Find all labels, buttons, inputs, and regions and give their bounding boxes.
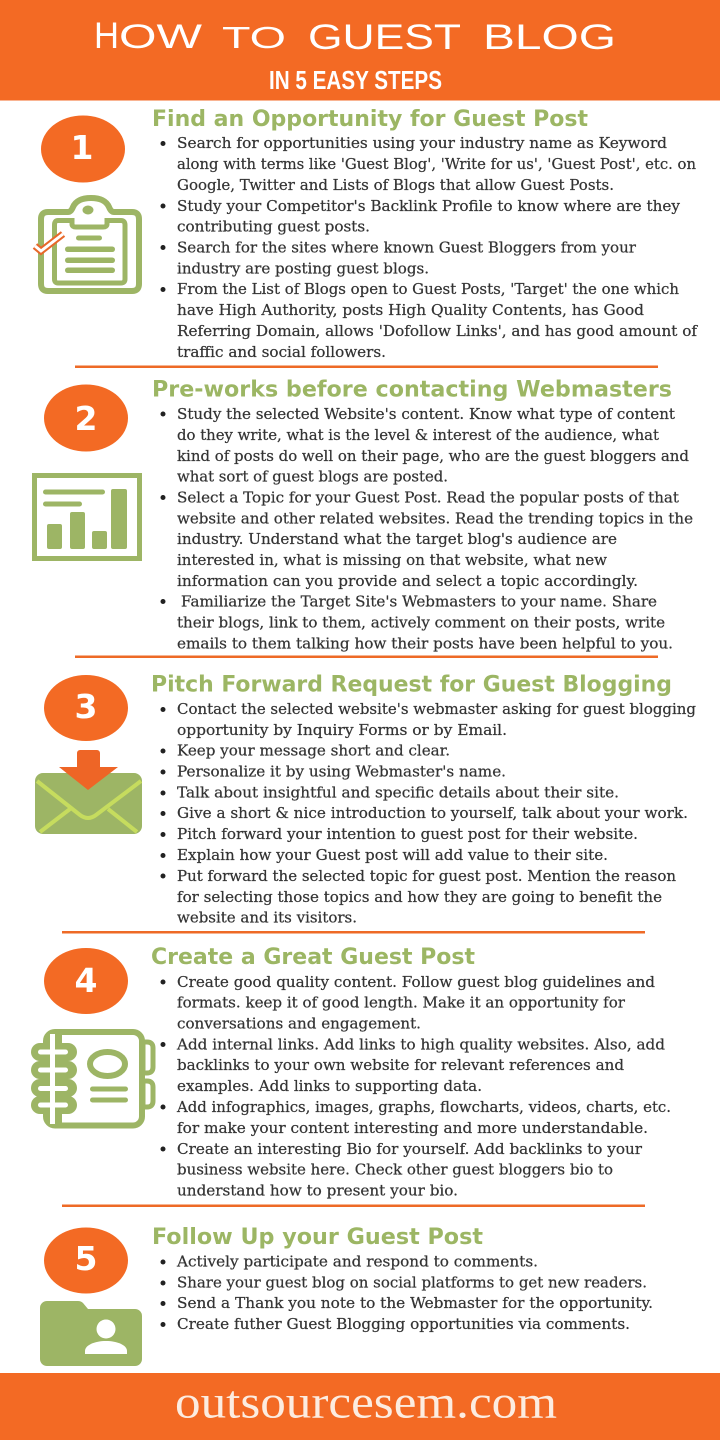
bullet list: step 1: Referring Domain, allows 'Dofollow Links', and has good amount of bbox=[177, 324, 699, 340]
bullet list: step 5: Actively participate and respond to comments. bbox=[176, 1254, 538, 1270]
bullet list: step 2 bbox=[160, 407, 693, 652]
panel: step 4 create a great guest post bbox=[31, 944, 671, 1200]
panel: step 2 pre-works bbox=[34, 376, 693, 652]
bullet list: step 2: do they write, what is the level & interest of the audience, what bbox=[177, 428, 659, 444]
title: BLOG bbox=[483, 18, 616, 57]
bullet list: step 2: industry. Understand what the target blog's audience are bbox=[177, 532, 617, 548]
bullet list: step 5: Send a Thank you note to the Webmaster for the opportunity. bbox=[177, 1296, 653, 1312]
bullet list: step 4: formats. keep it of good length. Make it an opportunity for bbox=[177, 996, 625, 1012]
bullet list: step 1: industry are posting guest blogs. bbox=[177, 262, 429, 278]
badge: number 1: 1 bbox=[71, 128, 93, 167]
panel: step 3 pitch forward bbox=[35, 672, 696, 926]
icon: folder with person bbox=[40, 1301, 142, 1366]
bullet list: step 1: From the List of Blogs open to Guest Posts, 'Target' the one which bbox=[177, 282, 679, 298]
bullet list: step 1: Search for opportunities using your industry name as Keyword bbox=[177, 136, 667, 152]
bullet list: step 4: examples. Add links to supporting data. bbox=[177, 1079, 482, 1095]
bullet list: step 1 bbox=[160, 136, 699, 361]
bullet list: step 3: Pitch forward your intention to guest post for their website. bbox=[177, 827, 638, 843]
badge: number 4: 4 bbox=[75, 961, 97, 1000]
bullet list: step 2: Familiarize the Target Site's Webmasters to your name. Share bbox=[181, 594, 657, 610]
bullet list: step 4: understand how to present your bio. bbox=[177, 1184, 458, 1200]
badge: number 5 bbox=[44, 1228, 128, 1294]
heading: step 4: Create a Great Guest Post bbox=[151, 944, 475, 970]
bullet list: step 4 bbox=[160, 975, 671, 1200]
icon: bar chart report bbox=[34, 476, 140, 558]
bullet list: step 2: website and other related websites. Read the trending topics in the bbox=[177, 512, 693, 528]
title bbox=[94, 15, 616, 57]
bullet list: step 2: interested in, what is missing on that website, what new bbox=[177, 553, 608, 569]
bullet list: step 1: Study your Competitor's Backlink Profile to know where are they bbox=[177, 199, 681, 215]
heading: step 1: Find an Opportunity for Guest Post bbox=[152, 106, 588, 132]
bullet list: step 3: Talk about insightful and specific details about their site. bbox=[177, 786, 619, 802]
bullet list: step 4: Create good quality content. Follow guest blog guidelines and bbox=[177, 975, 655, 991]
bullet list: step 3: Give a short & nice introduction to yourself, talk about your work. bbox=[177, 806, 688, 822]
title: OW bbox=[119, 18, 202, 56]
bullet list: step 2: Study the selected Website's content. Know what type of content bbox=[177, 407, 675, 423]
badge: number 2: 2 bbox=[75, 399, 97, 438]
bullet list: step 4: conversations and engagement. bbox=[177, 1016, 421, 1032]
title: GUEST bbox=[308, 18, 461, 57]
bullet list: step 3: Keep your message short and clear. bbox=[177, 744, 450, 760]
bullet list: step 1: traffic and social followers. bbox=[177, 345, 386, 361]
subtitle: IN 5 EASY STEPS bbox=[269, 65, 442, 95]
bullet list: step 1: Search for the sites where known Guest Bloggers from your bbox=[177, 240, 636, 256]
bullet list: step 3: Personalize it by using Webmaster's name. bbox=[177, 764, 506, 780]
icon: clipboard with check mark bbox=[35, 198, 139, 291]
bullet list: step 1: contributing guest posts. bbox=[177, 220, 370, 236]
bullet list: step 2: information can you provide and select a topic accordingly. bbox=[177, 574, 638, 590]
bullet list: step 2: what sort of guest blogs are posted. bbox=[177, 470, 448, 486]
heading: step 3: Pitch Forward Request for Guest Blogging bbox=[151, 672, 672, 698]
bullet list: step 5: Create futher Guest Blogging opportunities via comments. bbox=[177, 1317, 630, 1333]
footer website text: outsourcesem.com bbox=[175, 1376, 557, 1428]
bullet list: step 5: Share your guest blog on social platforms to get new readers. bbox=[177, 1276, 647, 1292]
bullet list: step 3: for selecting those topics and how they are going to benefit the bbox=[177, 890, 662, 906]
bullet list: step 3: Contact the selected website's webmaster asking for guest blogging bbox=[177, 702, 696, 718]
bullet list: step 1: Google, Twitter and Lists of Blogs that allow Guest Posts. bbox=[177, 178, 614, 194]
panel: step 5 follow up bbox=[40, 1224, 653, 1366]
icon: envelope with down arrow bbox=[35, 750, 142, 834]
icon: spiral notebook contact book bbox=[31, 1032, 153, 1126]
badge: number 3: 3 bbox=[75, 687, 97, 726]
heading: step 2: Pre-works before contacting Webmasters bbox=[152, 376, 672, 402]
bullet list: step 4: Create an interesting Bio for yourself. Add backlinks to your bbox=[177, 1142, 642, 1158]
bullet list: step 5 bbox=[160, 1254, 653, 1333]
bullet list: step 4: business website here. Check other guest bloggers bio to bbox=[177, 1162, 613, 1178]
bullet list: step 1: along with terms like 'Guest Blog', 'Write for us', 'Guest Post', etc. on bbox=[177, 157, 696, 173]
badge: number 5: 5 bbox=[75, 1239, 97, 1278]
bullet list: step 4: backlinks to your own website for relevant references and bbox=[177, 1058, 624, 1074]
bullet list: step 1: have High Authority, posts High Quality Contents, has Good bbox=[177, 303, 644, 319]
panel: step 1 find an opportunity bbox=[35, 106, 699, 361]
heading: step 5: Follow Up your Guest Post bbox=[152, 1224, 483, 1250]
bullet list: step 4: Add internal links. Add links to high quality websites. Also, add bbox=[176, 1038, 665, 1054]
header banner bbox=[0, 0, 720, 100]
bullet list: step 2: kind of posts do well on their page, who are the guest bloggers and bbox=[177, 449, 689, 465]
bullet list: step 3: Put forward the selected topic for guest post. Mention the reason bbox=[177, 869, 676, 885]
bullet list: step 4: Add infographics, images, graphs, flowcharts, videos, charts, etc. bbox=[176, 1100, 671, 1116]
bullet list: step 3: opportunity by Inquiry Forms or by Email. bbox=[177, 723, 507, 739]
badge: number 1 bbox=[41, 116, 125, 182]
bullet list: step 3: website and its visitors. bbox=[177, 910, 357, 926]
bullet list: step 3 bbox=[160, 702, 696, 926]
badge: number 4 bbox=[44, 948, 128, 1014]
title: H bbox=[94, 15, 119, 56]
badge: number 2 bbox=[44, 384, 128, 452]
bullet list: step 3: Explain how your Guest post will add value to their site. bbox=[177, 848, 608, 864]
bullet list: step 2: their blogs, link to them, actively comment on their posts, write bbox=[177, 616, 665, 632]
bullet list: step 4: for make your content interesting and more understandable. bbox=[177, 1121, 648, 1137]
bullet list: step 2: Select a Topic for your Guest Post. Read the popular posts of that bbox=[177, 490, 679, 506]
title: TO bbox=[222, 20, 286, 55]
badge: number 3 bbox=[44, 675, 128, 741]
footer banner bbox=[0, 1373, 720, 1440]
bullet list: step 2: emails to them talking how their posts have been helpful to you. bbox=[177, 636, 673, 652]
